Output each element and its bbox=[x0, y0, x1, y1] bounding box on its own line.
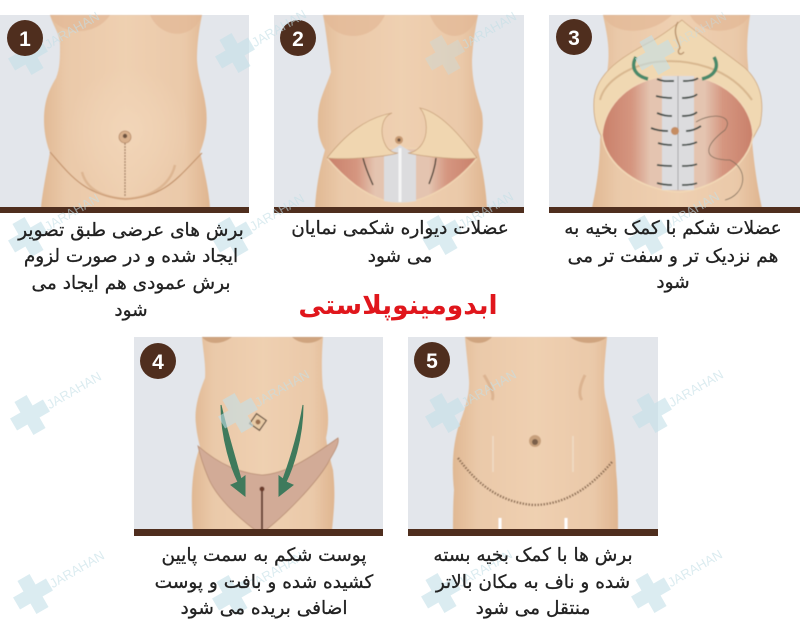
step number 2: 2 bbox=[292, 28, 304, 51]
caption: step 4 bbox=[155, 545, 374, 619]
skin flaps bbox=[327, 113, 398, 159]
caption: step 1: برش عمودی هم ایجاد می bbox=[32, 273, 230, 294]
background bbox=[0, 15, 249, 208]
rolled skin flap bbox=[594, 20, 762, 140]
navel bbox=[529, 435, 541, 447]
step number 3 bbox=[556, 19, 592, 55]
torso with rolled flap and sutured muscle bbox=[592, 15, 762, 208]
navel outline bbox=[250, 414, 266, 430]
panel: step 1 bbox=[0, 0, 249, 213]
step number 5: 5 bbox=[426, 350, 438, 373]
caption: step 1 bbox=[17, 220, 244, 321]
panel: step 2 bbox=[274, 15, 524, 213]
caption: step 4: اضافی بریده می شود bbox=[181, 598, 347, 619]
background bbox=[408, 337, 658, 530]
watermarks: JARAHAN bbox=[47, 548, 107, 591]
healed torso bbox=[453, 337, 618, 530]
divider bar bbox=[0, 207, 249, 213]
step number 4 bbox=[140, 343, 176, 379]
watermark: JARAHAN bbox=[42, 9, 102, 52]
step number 5 bbox=[414, 342, 450, 378]
exposed muscle bbox=[602, 75, 753, 192]
green retractor arrows bbox=[634, 57, 716, 79]
panel: step 5 bbox=[408, 337, 658, 536]
divider bar bbox=[408, 529, 658, 536]
watermarks: JARAHAN bbox=[459, 367, 519, 410]
watermarks: JARAHAN bbox=[252, 367, 312, 410]
torso with lifted flaps bbox=[315, 15, 487, 208]
green arrow left bbox=[221, 405, 245, 496]
background bbox=[274, 15, 524, 208]
caption: step 5 bbox=[433, 545, 633, 619]
step number 3: 3 bbox=[568, 27, 580, 50]
step number 2 bbox=[280, 20, 316, 56]
caption: step 3: عضلات شکم با کمک بخیه به bbox=[564, 218, 782, 239]
caption: step 2: عضلات دیواره شکمی نمایان bbox=[291, 218, 509, 239]
caption: step 3: شود bbox=[656, 272, 690, 293]
watermarks: JARAHAN bbox=[249, 7, 309, 50]
step number 1: 1 bbox=[19, 28, 31, 51]
divider bar bbox=[549, 207, 800, 213]
watermarks: JARAHAN bbox=[247, 191, 307, 234]
background bbox=[134, 337, 383, 530]
caption: step 3: هم نزدیک تر و سفت تر می bbox=[568, 246, 778, 267]
watermarks: JARAHAN bbox=[662, 189, 722, 232]
watermarks: JARAHAN bbox=[246, 549, 306, 592]
excised skin region bbox=[198, 438, 338, 530]
panel: step 4 bbox=[134, 337, 383, 536]
step number 1 bbox=[7, 20, 43, 56]
exposed muscle bbox=[327, 148, 477, 203]
step number 4: 4 bbox=[152, 351, 164, 374]
watermarks: JARAHAN bbox=[456, 189, 516, 232]
watermarks: JARAHAN bbox=[669, 9, 729, 52]
background bbox=[549, 15, 800, 208]
watermarks: JARAHAN bbox=[455, 547, 515, 590]
green arrow right bbox=[279, 405, 303, 496]
torso with hanging belly bbox=[41, 15, 210, 208]
caption: step 2: می شود bbox=[368, 246, 432, 267]
watermark bbox=[2, 0, 107, 81]
caption: step 3 bbox=[564, 218, 782, 293]
watermarks: JARAHAN bbox=[42, 191, 102, 234]
suture marks bbox=[651, 78, 701, 185]
divider bar bbox=[134, 529, 383, 536]
caption: step 2 bbox=[291, 218, 509, 267]
caption: step 5: برش ها با کمک بخیه بسته bbox=[433, 545, 633, 566]
caption: step 5: شده و ناف به مکان بالاتر bbox=[435, 572, 630, 593]
watermarks: JARAHAN bbox=[459, 9, 519, 52]
title: ابدومینوپلاستی bbox=[298, 290, 498, 321]
caption: step 1: شود bbox=[114, 300, 148, 321]
watermarks: JARAHAN bbox=[666, 367, 726, 410]
caption: step 1: برش های عرضی طبق تصویر bbox=[17, 220, 244, 241]
scar line bbox=[458, 458, 612, 505]
panel: step 3 bbox=[549, 15, 800, 213]
torso with excised skin bbox=[192, 337, 338, 530]
divider bar bbox=[274, 207, 524, 213]
caption: step 5: منتقل می شود bbox=[476, 598, 590, 619]
watermarks: JARAHAN bbox=[665, 547, 725, 590]
caption: step 4: پوست شکم به سمت پایین bbox=[162, 545, 366, 566]
suture thread bbox=[696, 116, 743, 200]
watermarks: JARAHAN bbox=[44, 369, 104, 412]
caption: step 4: کشیده شده و بافت و پوست bbox=[155, 572, 374, 593]
caption: step 1: ایجاد شده و در صورت لزوم bbox=[24, 246, 238, 267]
